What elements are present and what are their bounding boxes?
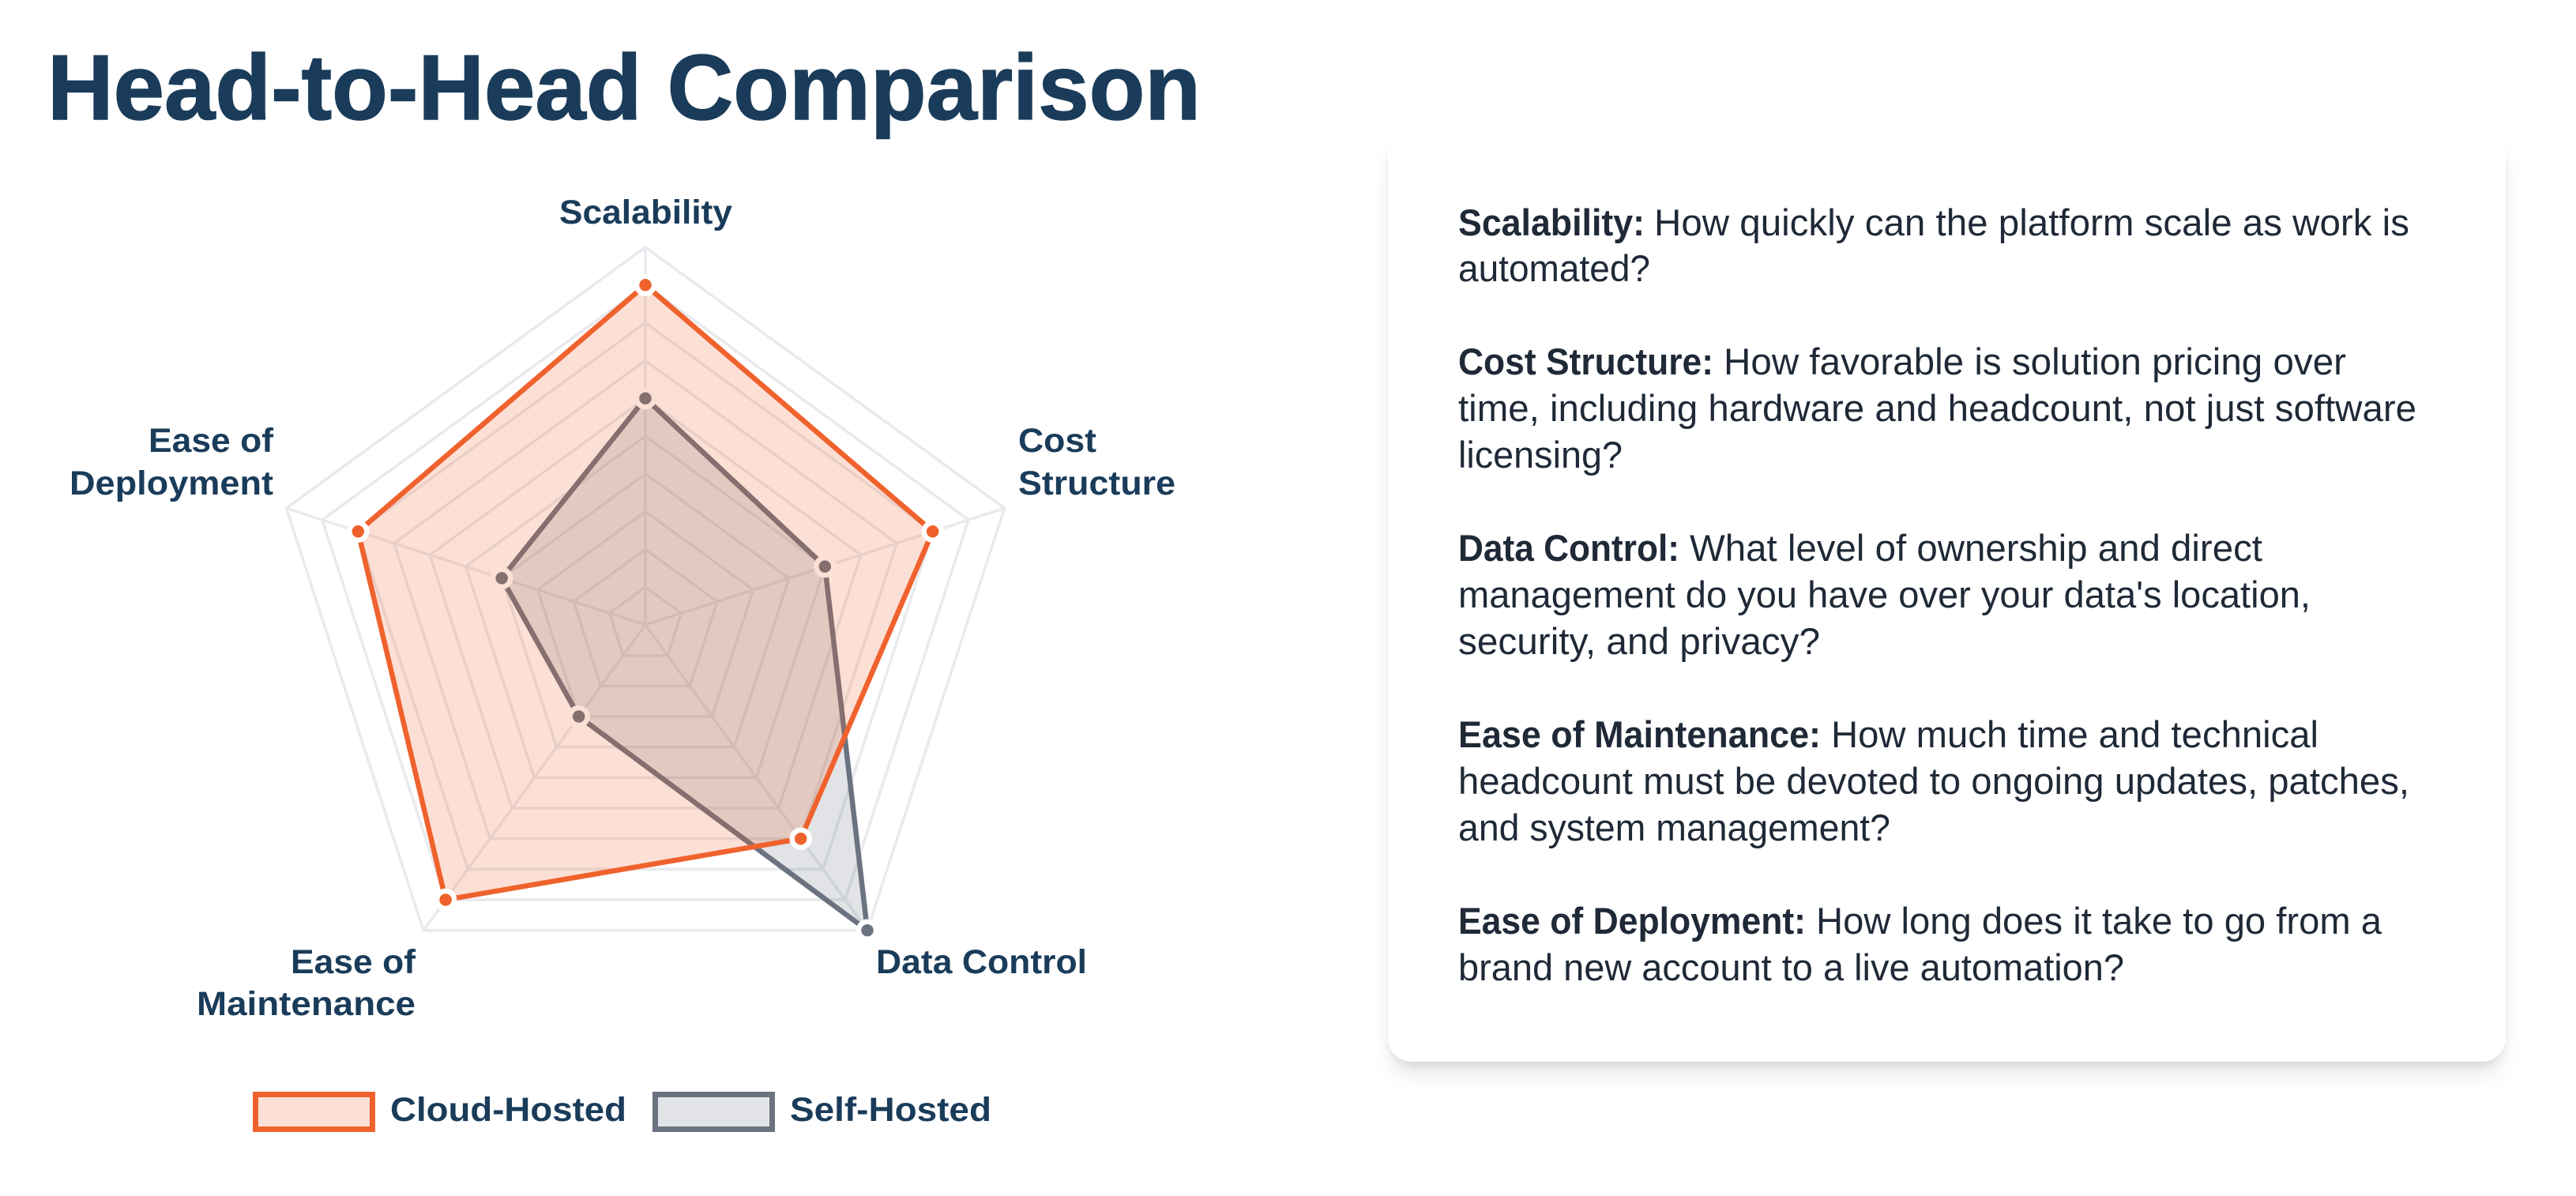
legend item: Self-Hosted: Self-Hosted [790, 1091, 991, 1129]
definition: Cost Structure: licensing? [1458, 434, 1623, 476]
definition: Ease of Deployment: brand new account to a live automation? [1458, 946, 2124, 988]
axis label: Ease of Deployment: Deployment [70, 464, 273, 502]
definition: Ease of Deployment: Ease of Deployment: [1458, 900, 1806, 942]
legend item: Cloud-Hosted: Cloud-Hosted [390, 1091, 626, 1129]
panel: definitions card [1388, 130, 2506, 1062]
definition: Data Control: management do you have over your data's location, [1458, 574, 2311, 615]
axis label: Ease of Maintenance: Ease of [291, 943, 416, 981]
definition: Ease of Deployment [1458, 900, 2382, 988]
definition: Ease of Maintenance: headcount must be devoted to ongoing updates, patches, [1458, 760, 2409, 802]
definition: Scalability: Scalability: [1458, 201, 1645, 243]
legend [256, 1091, 991, 1130]
definition: Ease of Maintenance: and system management? [1458, 807, 1890, 848]
radar chart [70, 194, 1175, 1132]
definition: Cost Structure: time, including hardware and headcount, not just software [1458, 387, 2416, 429]
title: Head-to-Head Comparison [47, 36, 1201, 139]
definition: Ease of Maintenance: Ease of Maintenance: [1458, 713, 1821, 755]
definition: Scalability: automated? [1458, 247, 1650, 289]
definition: Data Control: security, and privacy? [1458, 620, 1820, 662]
legend item: Cloud-Hosted [256, 1091, 626, 1130]
axis label: Cost Structure: Cost [1018, 422, 1096, 460]
axis label: Ease of Maintenance [197, 943, 416, 1023]
definition: Data Control [1458, 527, 2311, 662]
definition: Data Control: Data Control: [1458, 527, 1679, 569]
axis label: Ease of Deployment [70, 422, 274, 502]
axis label: Scalability: Scalability [559, 194, 732, 231]
series: cloud-hosted [349, 276, 942, 908]
definition: Ease of Maintenance [1458, 713, 2409, 848]
axis label: Ease of Deployment: Ease of [149, 422, 274, 460]
definition: Cost Structure [1458, 340, 2416, 476]
definition: Data Control: What level of ownership and direct [1690, 527, 2262, 569]
definition: Cost Structure: How favorable is solution pricing over [1724, 340, 2346, 382]
definition: Ease of Maintenance: How much time and technical [1831, 713, 2318, 755]
definition: Cost Structure: Cost Structure: [1458, 340, 1713, 382]
legend item: Self-Hosted [656, 1091, 991, 1130]
axis label: Cost Structure: Structure [1018, 464, 1175, 502]
axis label: Ease of Maintenance: Maintenance [197, 985, 416, 1023]
definition: Scalability [1458, 201, 2409, 289]
axis label: Cost Structure [1018, 422, 1175, 502]
series: self-hosted [493, 389, 876, 939]
definition: Ease of Deployment: How long does it take to go from a [1816, 900, 2382, 942]
axis label: Data Control: Data Control [876, 943, 1087, 981]
definition: Scalability: How quickly can the platform scale as work is [1654, 201, 2409, 243]
